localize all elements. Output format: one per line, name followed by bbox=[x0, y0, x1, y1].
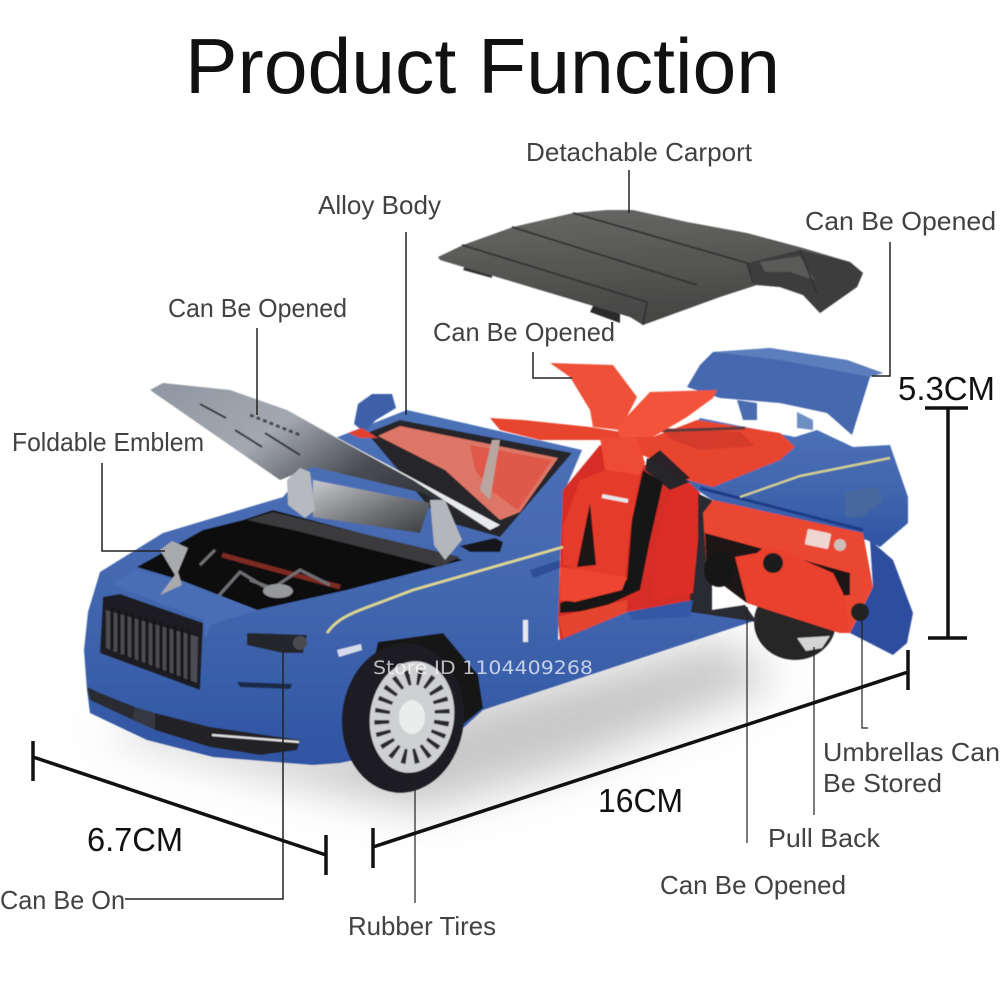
callout: rear door can be opened bbox=[433, 317, 615, 378]
deck stripes bbox=[660, 428, 755, 450]
boot lid bbox=[687, 348, 883, 435]
door opening bbox=[558, 445, 700, 640]
callout: door can be opened: Can Be Opened bbox=[660, 870, 846, 900]
nose panel bbox=[112, 570, 257, 640]
callout: foldable emblem bbox=[12, 427, 204, 551]
hinge bar bbox=[460, 538, 503, 552]
rear right door flap bbox=[617, 390, 717, 437]
watermark: Store ID 1104409268 bbox=[373, 657, 593, 679]
callout: lights can be on: Can Be On bbox=[0, 885, 125, 915]
callout: alloy body: Alloy Body bbox=[318, 190, 441, 220]
windshield bbox=[367, 420, 572, 537]
dimension: height 5.3CM bbox=[898, 370, 995, 638]
rear pinstripe bbox=[740, 458, 890, 497]
dimension: length 16CM: 16CM bbox=[598, 782, 683, 819]
callout: boot can be opened: Can Be Opened bbox=[805, 206, 996, 236]
front seat bbox=[560, 437, 663, 613]
under hood insert bbox=[313, 480, 430, 533]
side mirror bbox=[348, 394, 396, 438]
callout: lights can be on bbox=[0, 650, 283, 915]
door hinge area bbox=[690, 490, 757, 622]
fender lamp and intake bbox=[337, 644, 362, 657]
car model bbox=[84, 348, 913, 810]
grille bbox=[100, 594, 203, 690]
callout: pull back: Pull Back bbox=[768, 823, 881, 853]
callout: umbrellas can be stored: Umbrellas Can bbox=[823, 737, 1000, 767]
boot lid struts bbox=[737, 400, 757, 420]
seat rear pillar bbox=[653, 483, 698, 600]
body side pinstripe bbox=[327, 547, 563, 633]
title: Product Function bbox=[185, 22, 780, 110]
dimension: length 16CM bbox=[373, 650, 908, 868]
callout: rubber tires: Rubber Tires bbox=[348, 911, 496, 941]
callout: umbrellas can be stored bbox=[823, 620, 1000, 798]
dimension: width 6.7CM: 6.7CM bbox=[87, 821, 183, 858]
dimension: height 5.3CM: 5.3CM bbox=[898, 370, 995, 407]
main body bbox=[84, 410, 757, 765]
callout: rear door can be opened: Can Be Opened bbox=[433, 317, 615, 347]
open hood bbox=[150, 383, 500, 530]
detachable carport roof bbox=[438, 210, 863, 325]
rear body bbox=[660, 418, 908, 547]
callout: hood can be opened: Can Be Opened bbox=[168, 293, 347, 323]
door handles bbox=[530, 560, 560, 578]
front wheel bbox=[334, 633, 483, 799]
dimension: width 6.7CM bbox=[33, 741, 326, 875]
open door inner panel bbox=[703, 500, 873, 633]
callout: umbrellas can be stored: Be Stored bbox=[823, 768, 942, 798]
callout: detachable carport: Detachable Carport bbox=[526, 137, 753, 167]
callout: boot can be opened bbox=[805, 206, 996, 376]
headlight bbox=[247, 633, 307, 653]
rear left door flap bbox=[550, 363, 637, 430]
open door outer bbox=[850, 540, 913, 655]
callout: foldable emblem: Foldable Emblem bbox=[12, 427, 204, 457]
hood struts bbox=[287, 468, 315, 518]
floor and sill bbox=[558, 600, 627, 638]
carbon trim behind seat bbox=[645, 458, 690, 490]
ground shadow bbox=[100, 640, 780, 810]
emblem bbox=[160, 541, 188, 595]
rear wheel bbox=[754, 584, 836, 660]
engine bay bbox=[137, 510, 463, 610]
tail light housing bbox=[845, 487, 883, 517]
far seats and deck bbox=[490, 418, 795, 487]
door top seam bbox=[700, 488, 863, 530]
lower bumper grille bbox=[87, 687, 300, 755]
